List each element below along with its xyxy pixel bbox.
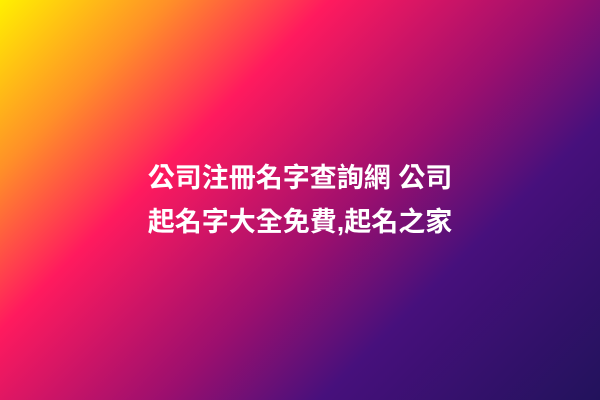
title: 起名字大全免費,起名之家: [148, 207, 452, 237]
title: 公司注冊名字查詢網 公司: [148, 163, 452, 193]
title: [148, 163, 452, 237]
